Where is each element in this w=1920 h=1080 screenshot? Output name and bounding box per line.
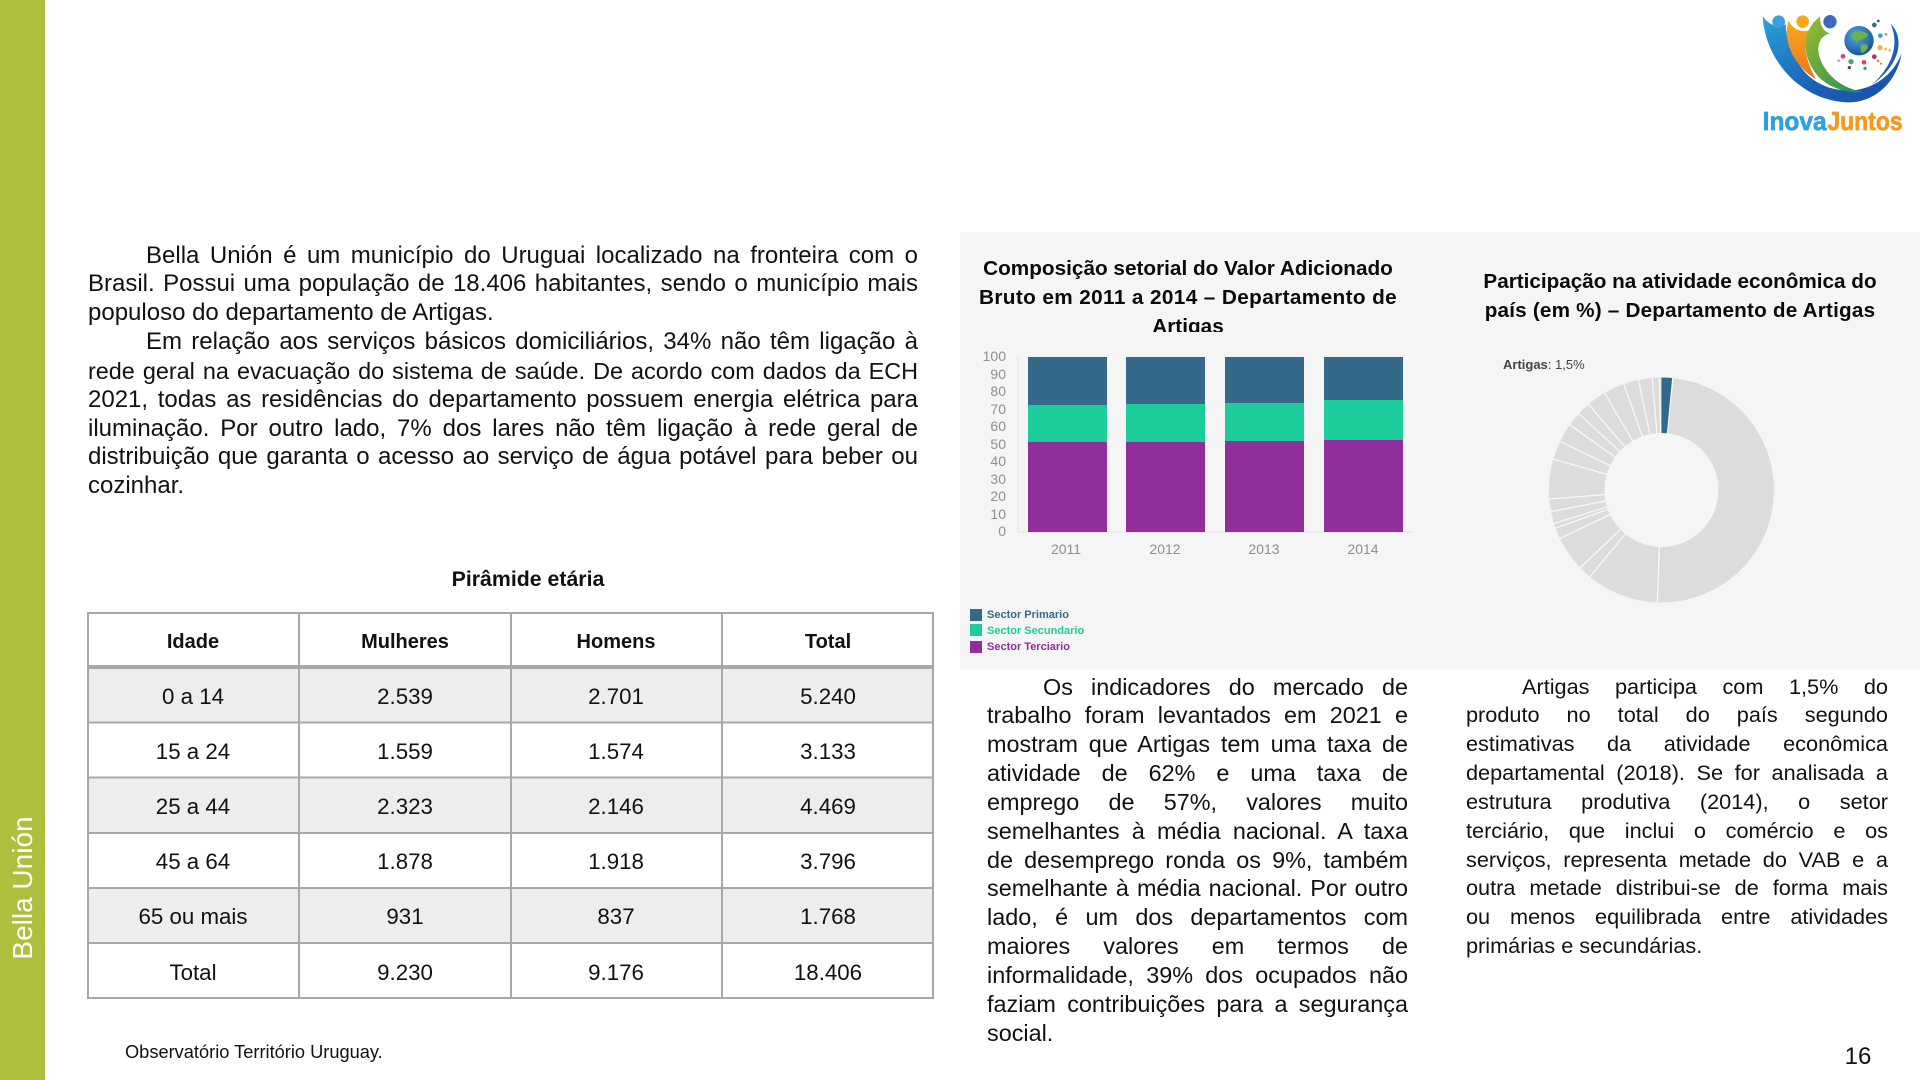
y axis labels: 10 [990,506,1006,522]
y axis labels: 80 [990,383,1006,399]
y axis labels: 90 [990,366,1006,382]
table: age pyramid: Homens [577,631,655,653]
text block: intro on Bella Unión: Em relação aos serviços básicos domiciliários, 34% não têm ligação à [146,328,918,355]
x axis labels: 2014 [1347,541,1379,557]
y axis labels: 40 [990,453,1006,469]
x axis labels: 2011 [1051,541,1081,557]
legend: Sector Secundario [987,625,1084,637]
table: age pyramid: 0 a 14 [162,684,224,709]
x axis labels: 2013 [1248,541,1280,557]
table: age pyramid: Total [805,631,851,653]
panel: charts background [960,232,1920,670]
heading: sector composition chart: Composição setorial do Valor Adicionado [983,257,1393,280]
x axis labels [1051,541,1379,557]
text block: labour market indicators: Os indicadores do mercado de [1043,674,1408,700]
y axis labels: 70 [990,401,1006,417]
text block: labour market indicators: semelhantes à média nacional. A taxa [987,818,1408,844]
text block: labour market indicators: social. [987,1020,1053,1046]
text block: labour market indicators: lado, é um dos departamentos com [987,904,1408,930]
text block: economic participation: departamental (2018). Se for analisada a [1466,760,1888,785]
text block: economic participation: outra metade distribui-se de forma mais [1466,875,1888,900]
table: age pyramid [87,612,934,999]
text block: economic participation: serviços, representa metade do VAB e a [1466,847,1888,872]
donut chart: share of national economic activity [1503,357,1774,602]
table: age pyramid: 2.323 [377,794,433,819]
y axis labels: 60 [990,418,1006,434]
legend: Sector Primario [987,609,1069,621]
text block: intro on Bella Unión: distribuição que garanta o acesso ao serviço de água potável para beber ou [88,443,918,470]
table: age pyramid: Mulheres [361,631,449,653]
y axis labels: 30 [990,471,1006,487]
logo: InovaJuntos [1762,15,1903,136]
donut slice: Artigas [1662,378,1672,433]
bar 2011 [1028,357,1107,532]
text block: economic participation: ou menos equilibrada entre atividades [1466,904,1888,929]
table: age pyramid: Idade [167,631,219,653]
heading: sector composition chart [979,257,1397,332]
table: age pyramid: 9.176 [588,960,644,985]
table: age pyramid: 2.701 [588,684,644,709]
text block: intro on Bella Unión: 2021, todas as residências do departamento possuem energia elétrica para [88,386,918,413]
text block: intro on Bella Unión [88,242,918,499]
text block: intro on Bella Unión: populoso do departamento de Artigas. [88,299,494,326]
table: age pyramid: 1.559 [377,739,433,764]
table: age pyramid: 2.146 [588,794,644,819]
text block: economic participation: estimativas da atividade econômica [1466,731,1888,756]
text block: labour market indicators [987,674,1408,1046]
text block: intro on Bella Unión: Brasil. Possui uma população de 18.406 habitantes, sendo o município mais [88,270,918,297]
text block: intro on Bella Unión: iluminação. Por outro lado, 7% dos lares não têm ligação à rede geral de [88,415,918,442]
table: age pyramid: 3.796 [800,849,856,874]
logo: InovaJuntos: Inova [1763,106,1827,136]
text block: labour market indicators: maiores valores em termos de [987,933,1408,959]
table: age pyramid: 9.230 [377,960,433,985]
y axis labels: 20 [990,488,1006,504]
text block: economic participation: Artigas participa com 1,5% do [1522,674,1888,698]
bar chart: sector composition 2011-2014 [970,348,1413,653]
text block: labour market indicators: de desemprego ronda os 9%, também [987,847,1408,873]
legend: Sector Terciario [987,641,1070,653]
y axis labels: 50 [990,436,1006,452]
source note: Observatório Território Uruguay. [125,1041,383,1062]
donut label: Artigas: 1,5% [1503,357,1585,372]
text block: labour market indicators: semelhante à média nacional. Por outro [987,875,1408,901]
table: age pyramid: 25 a 44 [156,794,230,819]
text block: economic participation: produto no total do país segundo [1466,702,1888,727]
heading: Pirâmide etária: Pirâmide etária [452,567,604,591]
table: age pyramid: 931 [386,904,424,929]
text block: labour market indicators: faziam contribuições para a segurança [987,991,1408,1017]
table: age pyramid: 1.574 [588,739,644,764]
bar 2013 [1225,357,1304,532]
table: age pyramid: 45 a 64 [156,849,230,874]
heading: donut chart [1483,270,1877,322]
text block: labour market indicators: emprego de 57%, valores muito [987,789,1408,815]
text block: intro on Bella Unión: rede geral na evacuação do sistema de saúde. De acordo com dados da ECH [88,358,918,384]
table: age pyramid: 4.469 [800,794,856,819]
text block: labour market indicators: mostram que Artigas tem uma taxa de [987,731,1408,757]
text block: economic participation [1466,674,1888,958]
logo: InovaJuntos: Juntos [1827,106,1903,136]
text block: intro on Bella Unión: cozinhar. [88,472,184,499]
bar 2014 [1324,357,1403,532]
sidebar label: Bella Unión [7,816,38,960]
text block: labour market indicators: trabalho foram levantados em 2021 e [987,702,1408,728]
table: age pyramid: 3.133 [800,739,856,764]
text block: economic participation: primárias e secundárias. [1466,933,1702,958]
text block: labour market indicators: informalidade, 39% dos ocupados não [987,962,1408,988]
text block: economic participation: estrutura produtiva (2014), o setor [1466,789,1888,814]
table: age pyramid: 1.918 [588,849,644,874]
table: age pyramid: 837 [597,904,635,929]
x axis labels: 2012 [1149,541,1181,557]
table: age pyramid: Total [169,960,217,985]
legend [970,609,1084,653]
heading: sector composition chart: Bruto em 2011 a 2014 – Departamento de [979,286,1397,309]
page number: 16 [1845,1043,1871,1070]
table: age pyramid: 5.240 [800,684,856,709]
heading: donut chart: Participação na atividade econômica do [1483,270,1877,292]
y axis labels: 0 [998,523,1006,539]
table: age pyramid: 1.878 [377,849,433,874]
heading: donut chart: país (em %) – Departamento de Artigas [1485,298,1875,322]
text block: intro on Bella Unión: Bella Unión é um município do Uruguai localizado na fronteira com o [146,242,918,268]
table: age pyramid: 18.406 [794,960,862,985]
table: age pyramid: 2.539 [377,684,433,709]
sidebar: green band [0,0,45,1080]
y axis labels: 100 [983,348,1006,364]
table: age pyramid: 15 a 24 [156,739,230,764]
bar 2012 [1126,357,1205,532]
table: age pyramid: 65 ou mais [138,904,248,929]
text block: labour market indicators: atividade de 62% e uma taxa de [987,760,1408,786]
table: age pyramid: 1.768 [800,904,856,929]
text block: economic participation: terciário, que inclui o comércio e os [1466,818,1888,843]
y axis labels [983,348,1006,539]
